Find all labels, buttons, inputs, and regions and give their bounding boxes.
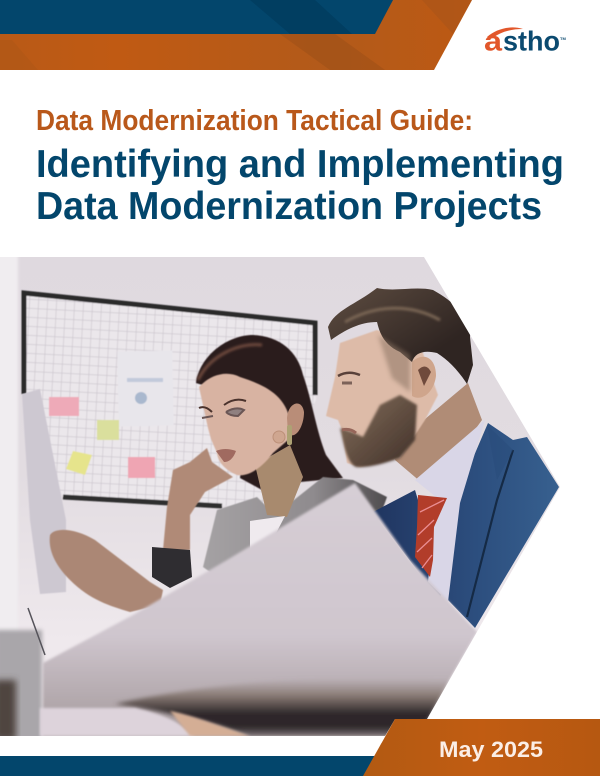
fade at temple	[378, 335, 410, 392]
brows, eyes, lips	[199, 400, 246, 412]
subtitle: orange: Data Modernization Tactical Guide:	[36, 105, 473, 137]
header banner	[0, 0, 472, 70]
man	[326, 288, 559, 628]
lapel line	[467, 450, 513, 617]
astho logo: a	[484, 26, 502, 56]
title line 1: Identifying and Implementing	[36, 143, 564, 186]
face	[199, 374, 290, 475]
left monitor blur	[0, 630, 42, 740]
office wall	[17, 257, 560, 706]
beard	[340, 395, 417, 467]
footer bar	[0, 719, 600, 776]
white top	[250, 516, 285, 548]
foreground desk items	[0, 483, 477, 740]
sleeve cuff	[152, 547, 192, 588]
face	[326, 330, 438, 467]
shirt	[415, 420, 485, 602]
hair	[196, 335, 343, 490]
jacket	[202, 476, 388, 572]
title	[36, 105, 564, 228]
woman	[50, 335, 387, 612]
eye, brow and mouth	[338, 373, 360, 376]
lower hand	[50, 530, 163, 612]
title line 2: Data Modernization Projects	[36, 185, 542, 228]
earring	[273, 431, 285, 443]
orange header band	[0, 0, 472, 70]
blue footer band	[0, 756, 380, 776]
tie	[415, 495, 447, 577]
neck	[255, 445, 303, 517]
raised forearm and hand	[163, 448, 233, 550]
orange date tab	[363, 719, 600, 776]
hair	[328, 288, 473, 384]
blue header band	[0, 0, 393, 34]
ear	[412, 357, 436, 398]
neck	[395, 383, 482, 478]
wall board with notes	[23, 291, 316, 508]
large blurred paper	[43, 483, 477, 736]
light foreground sheet	[40, 708, 195, 736]
astho logo: TM	[560, 36, 566, 41]
date: May 2025	[439, 737, 543, 762]
suit	[373, 423, 559, 628]
ear	[287, 403, 304, 435]
hexagonal photo: two colleagues reviewing documents	[0, 250, 600, 740]
dark foreground band	[115, 678, 450, 736]
paper held by woman	[22, 389, 66, 594]
astho logo: stho	[503, 26, 560, 56]
